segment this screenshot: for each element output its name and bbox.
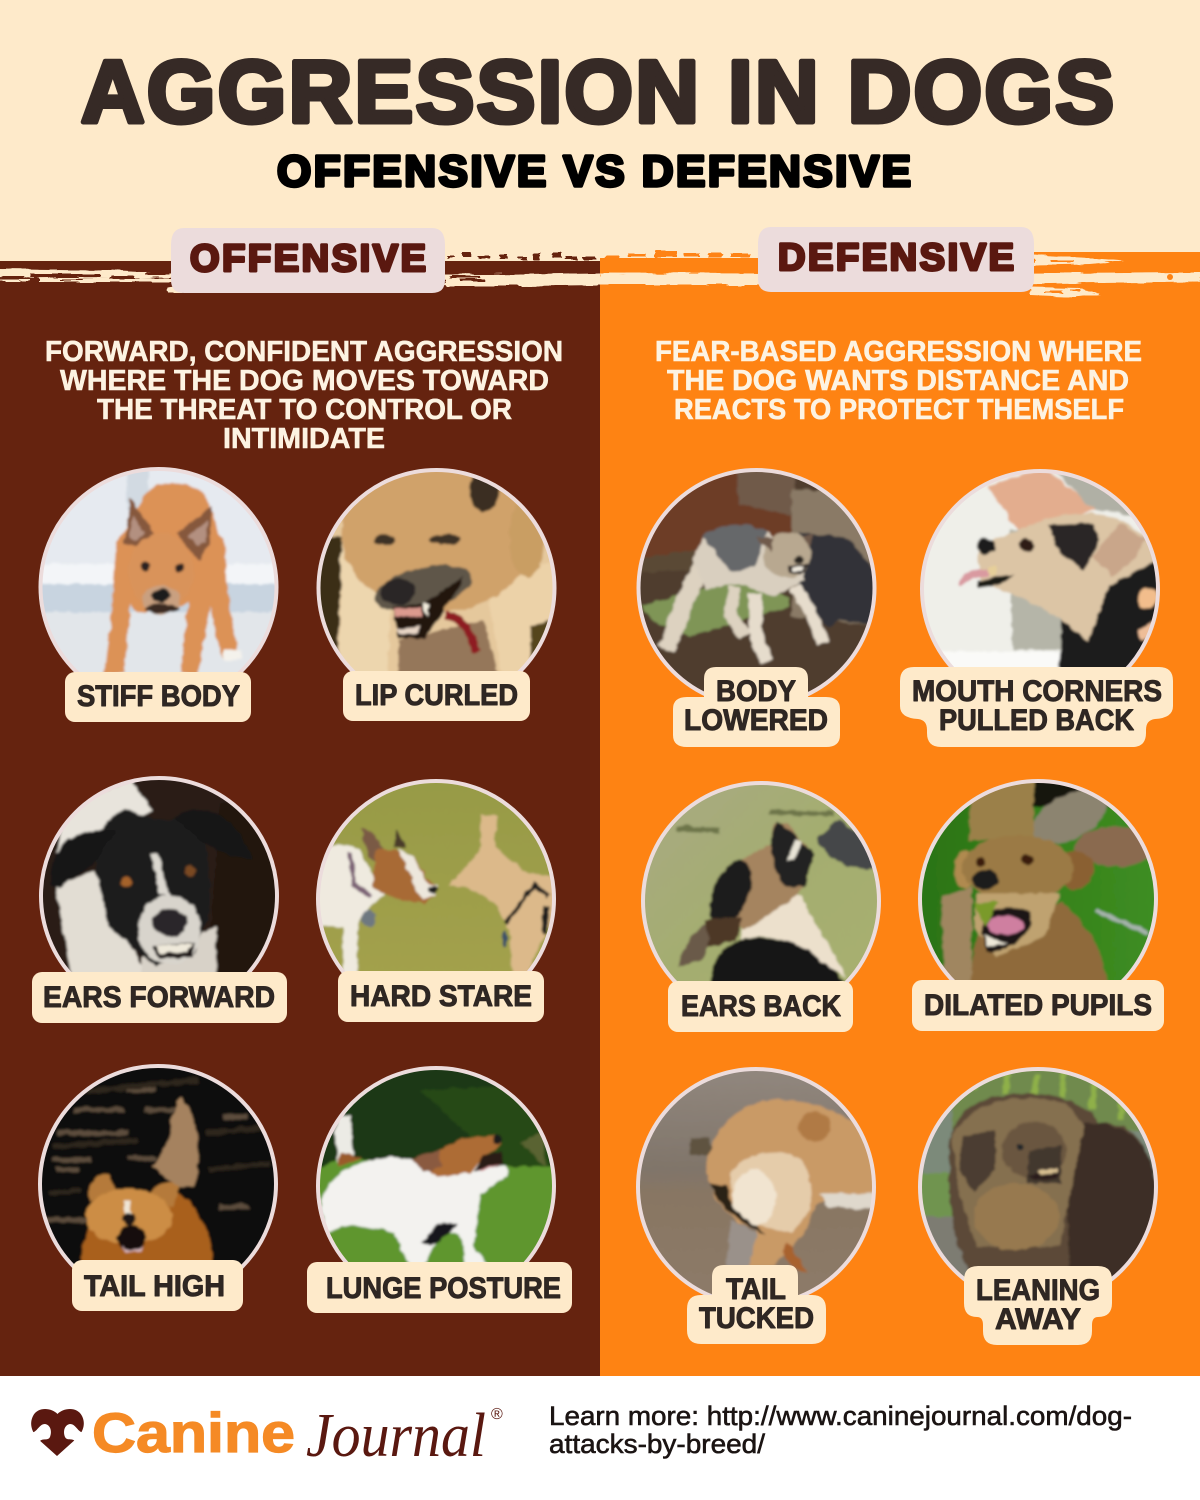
card: leaning away	[918, 1067, 1158, 1345]
photo: shepherd dog crouching in a yard	[640, 472, 872, 692]
text block: defensive description: THE DOG WANTS DISTANCE AND	[667, 365, 1129, 397]
title: AGGRESSION IN DOGS	[81, 42, 1114, 141]
tag: defensive	[758, 227, 1034, 292]
registered mark: ®	[491, 1406, 503, 1423]
logo: canine journal	[29, 1401, 503, 1470]
photo: black and white dog	[43, 780, 275, 972]
tag: offensive: OFFENSIVE	[190, 238, 426, 280]
card: tail tucked	[636, 1067, 876, 1344]
text block: learn more: attacks-by-breed/	[549, 1429, 766, 1459]
label: ears back: EARS BACK	[681, 990, 841, 1023]
panel: offensive	[0, 252, 600, 1376]
photo: white terrier lunging on grass	[320, 1070, 552, 1262]
label: ears back	[668, 981, 853, 1032]
icon: heart-shaped dog nose	[29, 1409, 86, 1456]
card: stiff body	[38, 467, 278, 722]
card: dilated pupils	[906, 767, 1170, 1031]
card: tail high	[38, 1064, 278, 1311]
text block: offensive description: INTIMIDATE	[223, 423, 385, 455]
text block: defensive description: FEAR-BASED AGGRESSION WHERE	[655, 336, 1142, 368]
label: ears forward: EARS FORWARD	[43, 981, 275, 1014]
label: ears forward	[32, 972, 287, 1023]
photo: shaggy pekingese leaning away	[922, 1071, 1154, 1277]
label: tail high: TAIL HIGH	[84, 1270, 225, 1303]
photo: stiff orange dog	[42, 471, 274, 672]
text block: learn more	[549, 1401, 1132, 1459]
photo: two small dogs face to face	[320, 783, 552, 972]
label: lip curled: LIP CURLED	[355, 679, 518, 712]
text block: offensive description: FORWARD, CONFIDENT AGGRESSION	[45, 336, 563, 368]
card: mouth corners pulled back	[900, 457, 1173, 747]
label: dilated pupils: DILATED PUPILS	[924, 989, 1152, 1022]
text block: offensive description	[45, 336, 563, 455]
card: lip curled	[316, 468, 556, 721]
label: hard stare: HARD STARE	[350, 980, 532, 1013]
label: lunge posture: LUNGE POSTURE	[326, 1272, 561, 1305]
label: leaning away: LEANING	[976, 1274, 1100, 1307]
label: body lowered: LOWERED	[684, 704, 828, 737]
card: ears back	[641, 781, 881, 1032]
label: dilated pupils	[912, 980, 1164, 1031]
text block: defensive description	[655, 336, 1142, 426]
card: ears forward	[27, 767, 291, 1023]
label: mouth corners pulled back: MOUTH CORNERS	[912, 675, 1162, 708]
photo: tan dog barking on chain	[922, 783, 1154, 980]
wordmark: Journal: Journal	[306, 1402, 486, 1470]
label: tail high	[72, 1260, 243, 1311]
label: tail tucked	[687, 1265, 826, 1344]
label: leaning away: AWAY	[995, 1303, 1081, 1336]
header background	[0, 0, 1200, 300]
text block: learn more: Learn more: http://www.caninejournal.com/dog-	[549, 1401, 1132, 1431]
text block: offensive description: THE THREAT TO CONTROL OR	[97, 394, 512, 426]
photo: snarling tan dog	[320, 472, 552, 671]
photo: rear of dog with tucked tail	[640, 1071, 872, 1295]
label: body lowered	[673, 667, 840, 747]
label: body lowered: BODY	[716, 675, 796, 708]
photo: dog with ears back snapping upward	[645, 785, 877, 982]
label: mouth corners pulled back: PULLED BACK	[939, 704, 1134, 737]
tag: defensive: DEFENSIVE	[778, 237, 1014, 279]
label: lunge posture	[307, 1262, 572, 1313]
card: lunge posture	[306, 1057, 572, 1313]
subtitle: OFFENSIVE VS DEFENSIVE	[277, 147, 911, 196]
wordmark: Canine: Canine	[92, 1401, 295, 1464]
label: stiff body: STIFF BODY	[77, 680, 240, 713]
panel: defensive	[600, 251, 1200, 1376]
card: body lowered	[636, 468, 876, 747]
label: tail tucked: TAIL	[726, 1273, 786, 1306]
card: hard stare	[316, 779, 556, 1022]
label: tail tucked: TUCKED	[699, 1302, 814, 1335]
label: leaning away	[964, 1266, 1112, 1345]
label: lip curled	[343, 671, 530, 721]
photo: chihuahua pulling lips back	[924, 473, 1156, 667]
label: mouth corners pulled back	[900, 667, 1173, 747]
photo: barking fluffy dog with raised tail	[42, 1068, 274, 1264]
label: stiff body	[65, 672, 251, 722]
label: hard stare	[338, 971, 544, 1022]
footer	[0, 1376, 1200, 1500]
text block: offensive description: WHERE THE DOG MOVES TOWARD	[60, 365, 549, 397]
text block: defensive description: REACTS TO PROTECT THEMSELF	[674, 394, 1124, 426]
tag: offensive	[171, 228, 445, 293]
